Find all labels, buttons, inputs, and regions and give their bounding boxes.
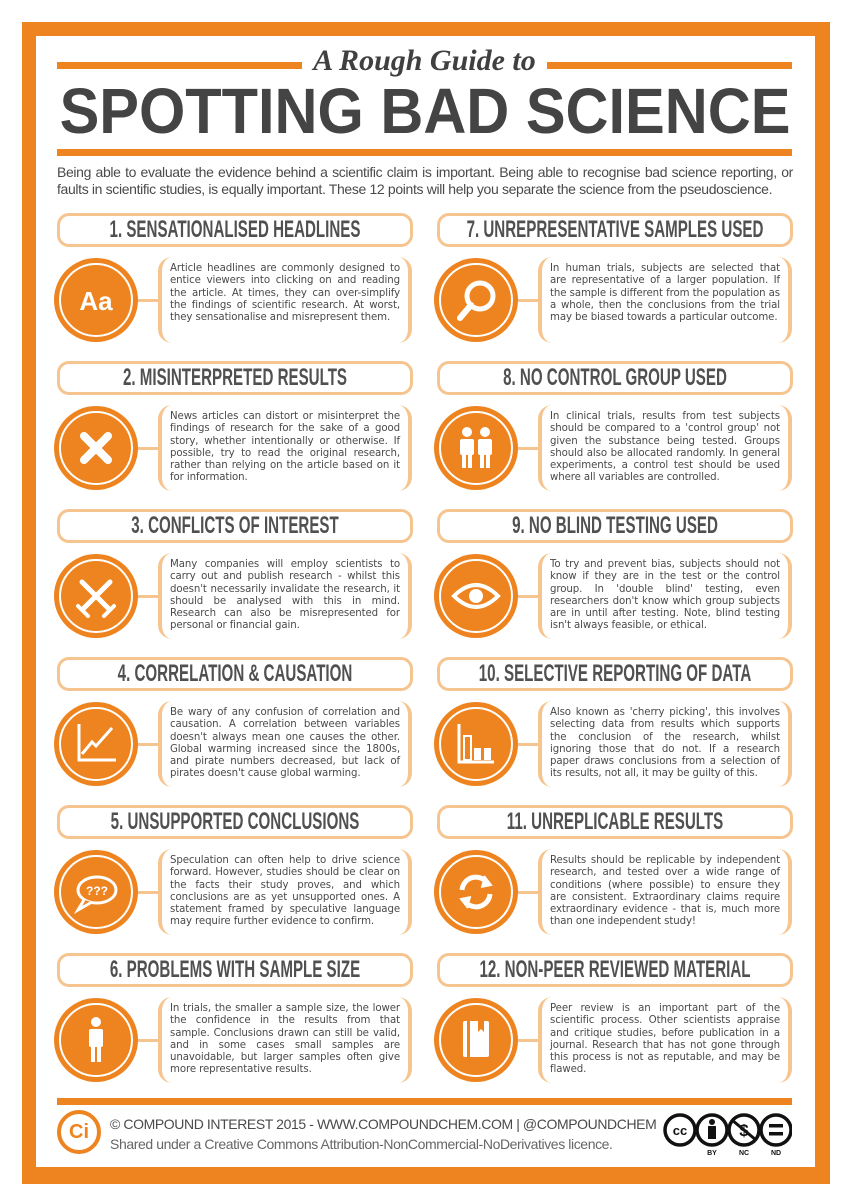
icon: CC licence: cc [673, 1123, 687, 1138]
icon: CC licence: BY [707, 1150, 717, 1157]
heading 1: 1. SENSATIONALISED HEADLINES [110, 216, 360, 243]
heading 6 [57, 953, 413, 987]
icon: line graph [54, 702, 138, 786]
heading 9 [437, 509, 793, 543]
heading 11: 11. UNREPLICABLE RESULTS [507, 808, 723, 835]
heading 6: 6. PROBLEMS WITH SAMPLE SIZE [110, 956, 360, 983]
icon: CC licence: NC [739, 1150, 749, 1157]
icon: CC licence: $ [739, 1121, 749, 1140]
text 7: In human trials, subjects are selected that are representative of a larger population. If the sample is different from the population as a whole, then the conclusions from the trial may be biased towards a particular outcome. [550, 263, 780, 323]
panel 2 [54, 361, 413, 491]
icon: two people [434, 406, 518, 490]
icon: Ci logo: Ci [69, 1121, 89, 1143]
panel 12 [434, 953, 793, 1083]
text 7 [538, 257, 792, 343]
icon: refresh arrows [434, 850, 518, 934]
title: Spotting Bad Science: SPOTTING BAD SCIENCE [59, 75, 790, 147]
heading 3: 3. CONFLICTS OF INTEREST [131, 512, 339, 539]
heading 4 [57, 657, 413, 691]
text 6: In trials, the smaller a sample size, the lower the confidence in the results from that sample. Conclusions drawn can still be valid, and in some cases small samples are unavoidable, but larger samples often give more representative results. [170, 1003, 400, 1075]
icon: speech bubble [54, 850, 138, 934]
heading 4: 4. CORRELATION & CAUSATION [118, 660, 352, 687]
icon: magnifier [434, 258, 518, 342]
icon: book [434, 998, 518, 1082]
text 5: Speculation can often help to drive science forward. However, studies should be clear on the facts their study proves, and which conclusions are as yet unsupported ones. A statement framed by speculative language may require further evidence to confirm. [170, 855, 400, 927]
icon: CC licence: ND [771, 1150, 781, 1157]
intro text: Being able to evaluate the evidence behind a scientific claim is important. Being able to recognise bad science reporting, or faults in scientific studies, is equally important. These 12 points will help you separate the science from the pseudoscience. [57, 164, 793, 197]
text 8: In clinical trials, results from test subjects should be compared to a 'control group' not given the substance being tested. Groups should also be allocated randomly. In general experiments, a control test should be used where all variables are controlled. [550, 411, 780, 483]
heading 10 [437, 657, 793, 691]
icon: cross [54, 406, 138, 490]
text 9: To try and prevent bias, subjects should not know if they are in the test or the control group. In 'double blind' testing, even researchers don't know which group subjects are in until after testing. Note, blind testing isn't always feasible, or ethical. [550, 559, 780, 631]
text 4: Be wary of any confusion of correlation and causation. A correlation between variables doesn't always mean one causes the other. Global warming increased since the 1800s, and pirate numbers decreased, but lack of pirates doesn't cause global warming. [170, 707, 400, 779]
heading 11 [437, 805, 793, 839]
heading 12 [437, 953, 793, 987]
heading 10: 10. SELECTIVE REPORTING OF DATA [479, 660, 751, 687]
heading 7: 7. UNREPRESENTATIVE SAMPLES USED [467, 216, 763, 243]
text 11: Results should be replicable by independent research, and tested over a wide range of conditions (where possible) to ensure they are consistent. Extraordinary claims require extraordinary evidence - that is, much more than one independent study! [550, 855, 780, 927]
panel 5 [54, 805, 413, 935]
footer [57, 1110, 792, 1157]
text 1: Article headlines are commonly designed to entice viewers into clicking on and reading the article. At times, they can over-simplify the findings of scientific research. At worst, they sensationalise and misrepresent them. [170, 263, 400, 323]
heading 3 [57, 509, 413, 543]
heading 9: 9. NO BLIND TESTING USED [512, 512, 718, 539]
panel 1 [54, 213, 413, 343]
heading 8 [437, 361, 793, 395]
icon: Aa: Aa [79, 286, 113, 316]
credits text: © COMPOUND INTEREST 2015 - WWW.COMPOUNDCHEM.COM | @COMPOUNDCHEM [110, 1116, 656, 1132]
icon: CC licence [663, 1113, 792, 1157]
heading 5 [57, 805, 413, 839]
title: A Rough Guide to [57, 44, 792, 77]
heading 2: 2. MISINTERPRETED RESULTS [123, 364, 347, 391]
icon: Ci logo [57, 1110, 101, 1154]
credits text: Shared under a Creative Commons Attribution-NonCommercial-NoDerivatives licence. [110, 1136, 613, 1152]
heading 12: 12. NON-PEER REVIEWED MATERIAL [479, 956, 751, 983]
heading 5: 5. UNSUPPORTED CONCLUSIONS [111, 808, 359, 835]
title: A Rough Guide to: A Rough Guide to [313, 44, 536, 77]
text 2: News articles can distort or misinterpret the findings of research for the sake of a good story, whether intentionally or otherwise. If possible, try to read the original research, rather than relying on the article based on it for information. [170, 411, 400, 483]
panel 3 [54, 509, 413, 639]
panel 4 [54, 657, 413, 787]
icon: speech bubble: ??? [86, 884, 108, 898]
icon: eye [434, 554, 518, 638]
heading 1 [57, 213, 413, 247]
panel 10 [434, 657, 793, 787]
heading 7 [437, 213, 793, 247]
panel 7 [434, 213, 793, 343]
heading 2 [57, 361, 413, 395]
panel 8 [434, 361, 793, 491]
panel 11 [434, 805, 793, 935]
icon: bar chart [434, 702, 518, 786]
credits text [110, 1116, 656, 1152]
icon: Aa [54, 258, 138, 342]
text 1 [158, 257, 412, 343]
text 12: Peer review is an important part of the scientific process. Other scientists appraise and critique studies, before publication in a journal. Research that has not gone through this process is not as reputable, and may be flawed. [550, 1003, 780, 1075]
icon: crossed swords [54, 554, 138, 638]
heading 8: 8. NO CONTROL GROUP USED [503, 364, 727, 391]
panel 9 [434, 509, 793, 639]
text 3: Many companies will employ scientists to carry out and publish research - whilst this doesn't necessarily invalidate the research, it should be analysed with this in mind. Research can also be misrepresented for personal or financial gain. [170, 559, 400, 631]
text 10: Also known as 'cherry picking', this involves selecting data from results which supports the conclusion of the research, whilst ignoring those that do not. If a research paper draws conclusions from a selection of its results, not all, it may be guilty of this. [550, 707, 780, 779]
panel 6 [54, 953, 413, 1083]
icon: person [54, 998, 138, 1082]
